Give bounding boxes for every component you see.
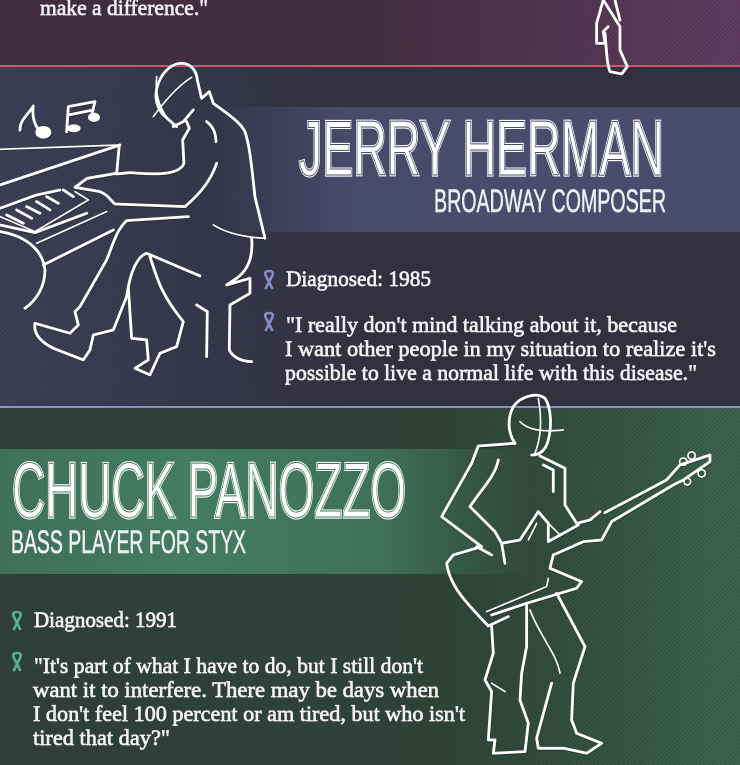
text: quote: I don't feel 100 percent or am tired, but who isn't bbox=[33, 701, 465, 726]
text: quote bbox=[285, 312, 716, 385]
icon: music notes bbox=[20, 102, 100, 139]
banner: Chuck Panozzo bbox=[0, 449, 530, 574]
subtitle: Bass Player for Styx: BASS PLAYER FOR STYX bbox=[11, 524, 246, 560]
text: diagnosed: Diagnosed: 1991 bbox=[34, 607, 177, 632]
text: quote: tired that day?" bbox=[33, 725, 170, 750]
icon: ribbon bbox=[13, 653, 21, 671]
lavender divider line bbox=[0, 406, 740, 408]
title: Chuck Panozzo: CHUCK PANOZZO bbox=[12, 446, 406, 534]
text: quote: want it to interfere. There may be days when bbox=[33, 677, 439, 702]
banner: Jerry Herman bbox=[225, 107, 740, 232]
text: quote: possible to live a normal life with this disease." bbox=[285, 360, 697, 385]
text: quote: "I really don't mind talking about it, because bbox=[286, 312, 677, 337]
panel: previous person footer bbox=[0, 0, 740, 65]
icon: ribbon bbox=[265, 313, 273, 331]
icon: ribbon bbox=[13, 612, 21, 630]
text: quote: I want other people in my situation to realize it's bbox=[285, 336, 716, 361]
text: diagnosed: Diagnosed: 1985 bbox=[286, 266, 431, 291]
text: quote: "It's part of what I have to do, but I still don't bbox=[34, 653, 423, 678]
illustration: pianist bbox=[0, 63, 265, 375]
panel: Chuck Panozzo bbox=[0, 395, 740, 765]
illustration: bass player bbox=[442, 395, 710, 753]
title: Chuck Panozzo: CHUCK PANOZZO bbox=[12, 446, 406, 534]
pink divider line bbox=[0, 65, 740, 67]
text: quote bbox=[33, 653, 465, 750]
title: Chuck Panozzo bbox=[12, 446, 406, 534]
icon: ribbon bbox=[265, 271, 273, 289]
illustration: previous figure's feet bbox=[597, 0, 627, 74]
panel: Jerry Herman bbox=[0, 63, 740, 407]
